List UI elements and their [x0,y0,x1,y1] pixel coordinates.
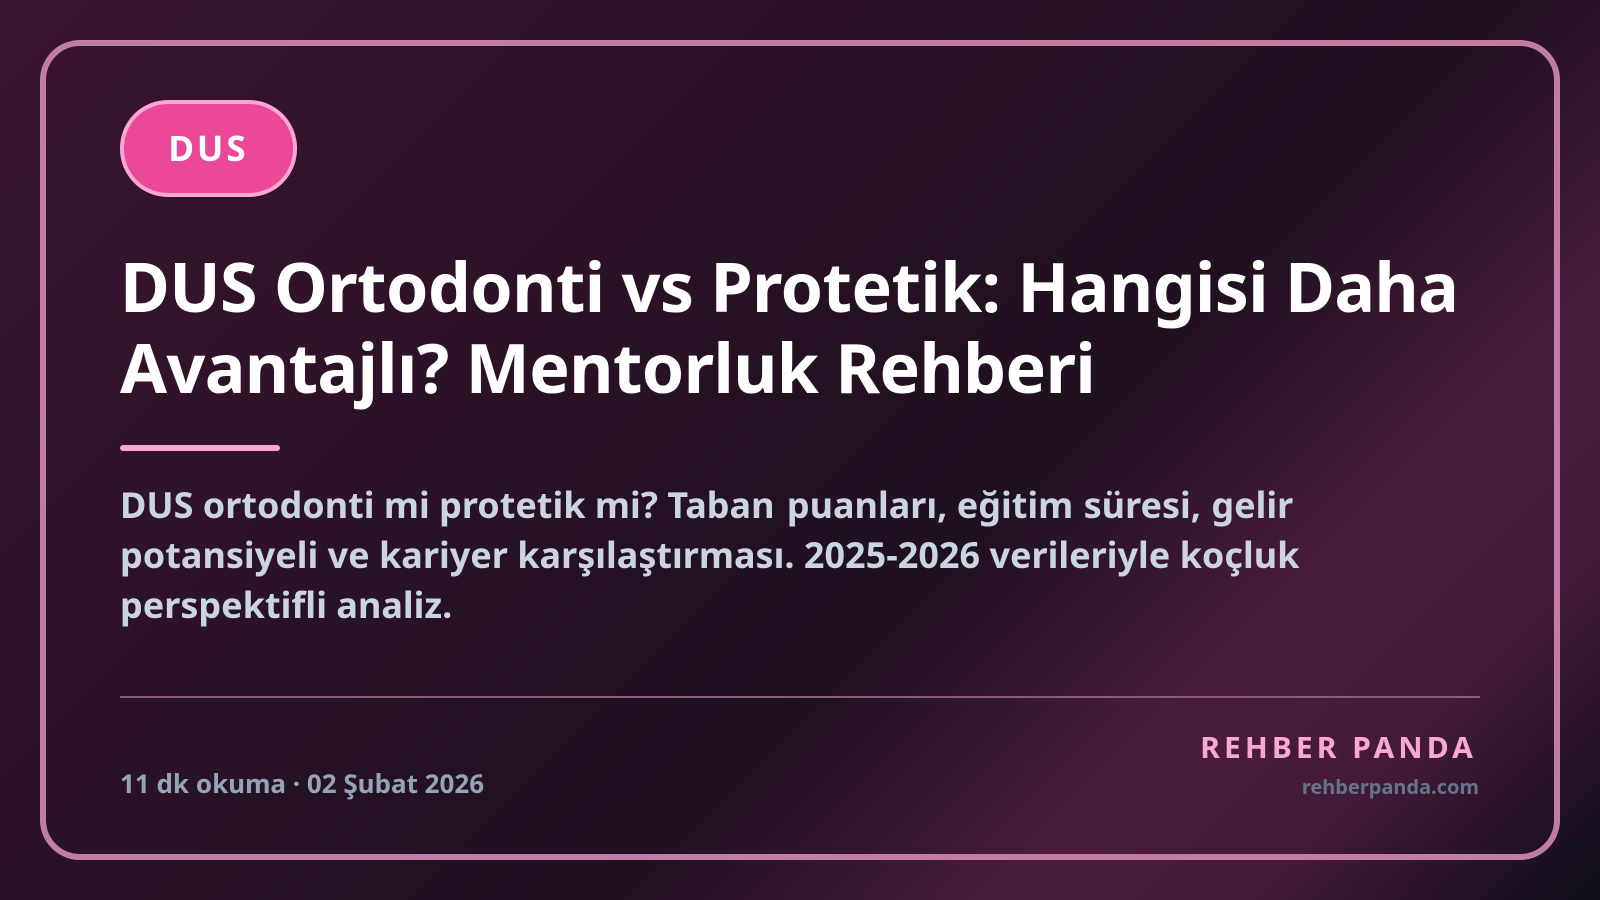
brand website: rehberpanda.com [1302,773,1479,800]
accent rule [120,445,280,451]
title: Avantajlı? Mentorluk Rehberi [120,320,1095,413]
brand name: REHBER PANDA [1200,726,1477,767]
description: perspektifli analiz. [120,580,452,629]
badge: DUS [120,100,297,197]
badge: DUS: DUS [168,125,249,172]
title [120,239,1458,413]
description: DUS ortodonti mi protetik mi? Taban puanları, eğitim süresi, gelir [120,480,1293,529]
footer divider [120,696,1480,698]
description [120,480,1300,629]
reading time and date: 11 dk okuma · 02 Şubat 2026 [120,765,484,801]
title: DUS Ortodonti vs Protetik: Hangisi Daha [120,239,1458,332]
description: potansiyeli ve kariyer karşılaştırması. 2025-2026 verileriyle koçluk [120,530,1299,579]
